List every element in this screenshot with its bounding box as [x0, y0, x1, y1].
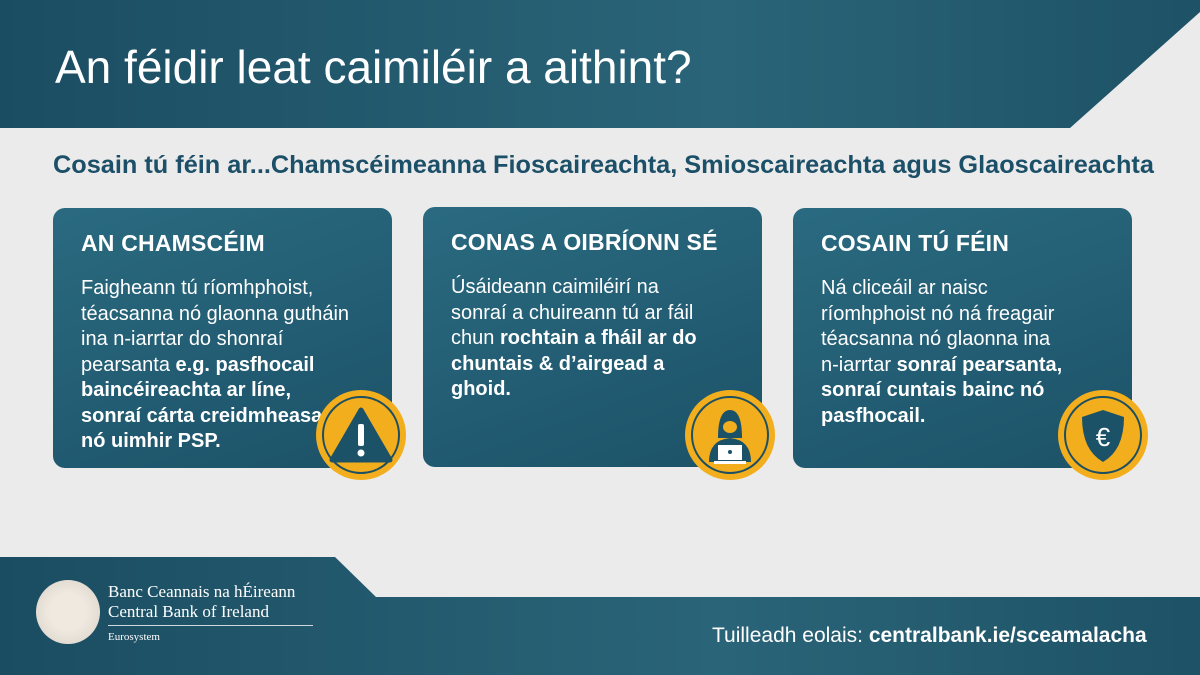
panel: an chamscéim: pearsanta e.g. pasfhocail [81, 354, 314, 376]
logo: central bank: Banc Ceannais na hÉireann [108, 582, 295, 601]
title: An féidir leat caimiléir a aithint? [55, 41, 692, 93]
panel: conas a oibríonn sé: ghoid. [451, 378, 511, 400]
icon: shield euro: € [1096, 422, 1111, 452]
icon: hacker [685, 390, 775, 480]
panel: an chamscéim: téacsanna nó glaonna gutháin [81, 302, 349, 324]
panel: cosain tú féin: téacsanna nó glaonna ina [821, 328, 1050, 350]
panel: conas a oibríonn sé: Úsáideann caimiléirí na [451, 276, 659, 298]
panel: cosain tú féin: pasfhocail. [821, 404, 925, 426]
panel: cosain tú féin [793, 208, 1132, 468]
panel: conas a oibríonn sé: chuntais & d’airgead a [451, 352, 664, 374]
panel: cosain tú féin: ríomhphoist nó ná freagair [821, 302, 1054, 324]
panel: cosain tú féin: Ná cliceáil ar naisc [821, 277, 988, 299]
icon: shield euro [1058, 390, 1148, 480]
panel: an chamscéim: sonraí cárta creidmheasa [81, 404, 322, 426]
panel: conas a oibríonn sé [423, 207, 762, 467]
panel: an chamscéim: ina n-iarrtar do shonraí [81, 328, 283, 350]
panel: cosain tú féin: COSAIN TÚ FÉIN [821, 230, 1009, 256]
panel: conas a oibríonn sé: CONAS A OIBRÍONN SÉ [451, 229, 718, 255]
logo: central bank [36, 580, 313, 644]
panel: an chamscéim: Faigheann tú ríomhphoist, [81, 277, 313, 299]
panel: conas a oibríonn sé: chun rochtain a fháil ar do [451, 327, 697, 349]
panel: an chamscéim [53, 208, 392, 468]
panel: an chamscéim: baincéireachta ar líne, [81, 379, 291, 401]
logo: central bank: Central Bank of Ireland [108, 602, 269, 621]
icon: warning [316, 390, 406, 480]
panel: an chamscéim: AN CHAMSCÉIM [81, 230, 265, 256]
subtitle: Cosain tú féin ar...Chamscéimeanna Fioscaireachta, Smioscaireachta agus Glaoscaireachta [53, 151, 1154, 179]
logo: central bank: Eurosystem [108, 631, 160, 643]
panel: cosain tú féin: sonraí cuntais bainc nó [821, 379, 1044, 401]
panel: an chamscéim: nó uimhir PSP. [81, 430, 221, 452]
footer link text: Tuilleadh eolais: centralbank.ie/sceamalacha [712, 624, 1147, 647]
panel: cosain tú féin: n-iarrtar sonraí pearsanta, [821, 354, 1062, 376]
panel: conas a oibríonn sé: sonraí a chuireann tú ar fáil [451, 302, 693, 324]
